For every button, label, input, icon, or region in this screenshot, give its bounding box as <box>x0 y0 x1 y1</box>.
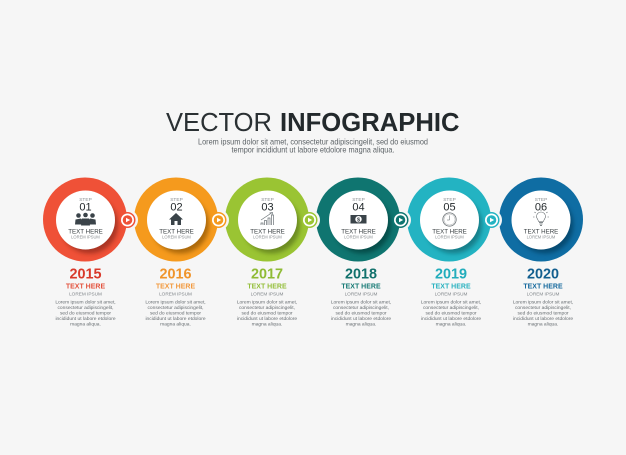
column 1 text: consectetur adipiscingelit, <box>57 305 114 311</box>
column 2 text: LOREM IPSUM <box>159 292 192 297</box>
notch 5 <box>481 210 502 230</box>
column 5 text: 2019 <box>435 266 467 282</box>
column 5 text: LOREM IPSUM <box>435 292 467 297</box>
disc 3 <box>238 190 300 254</box>
icon: light bulb <box>533 210 549 226</box>
step 1 labels: 01 <box>79 202 92 214</box>
column 1 text: sed do eiusmod tempor <box>60 310 111 316</box>
column 4 text <box>331 266 391 328</box>
step 5 labels: STEP <box>443 197 456 203</box>
column 1 text: TEXT HERE <box>66 284 105 291</box>
column 2 text: consectetur adipiscingelit, <box>147 305 204 311</box>
column 4 text: magna aliqua. <box>346 322 376 328</box>
column 4 text: consectetur adipiscingelit, <box>333 305 389 311</box>
step 2 labels <box>159 197 194 239</box>
column 4 text: sed do eiusmod tempor <box>335 310 387 316</box>
step 6 labels: 06 <box>535 202 547 214</box>
column 2 text: 2016 <box>159 266 192 282</box>
step 6 labels: STEP <box>535 197 547 203</box>
step 3 labels: TEXT HERE <box>250 228 285 235</box>
subtitle: tempor incididunt ut labore etdolore magna aliqua. <box>232 146 394 154</box>
arrow 3 <box>302 212 318 228</box>
arrow 4 <box>392 212 408 228</box>
column 3 text: magna aliqua. <box>252 322 282 328</box>
column 4 text: TEXT HERE <box>341 284 381 291</box>
title: VECTOR <box>166 109 272 137</box>
arrow 2 <box>210 212 226 228</box>
column 2 text: Lorem ipsum dolor sit amet, <box>145 300 206 306</box>
step 6 labels: TEXT HERE <box>524 228 558 235</box>
arrow 5 <box>484 212 500 228</box>
column 5 text <box>421 266 481 328</box>
column 6 text: consectetur adipiscingelit, <box>515 305 571 311</box>
icon: clock <box>443 213 456 226</box>
column 1 text: Lorem ipsum dolor sit amet, <box>55 300 116 306</box>
step 1 labels: LOREM IPSUM <box>71 234 100 239</box>
step 6 labels: LOREM IPSUM <box>527 234 556 239</box>
step 4 labels: STEP <box>352 197 365 203</box>
column 5 text: sed do eiusmod tempor <box>425 310 477 316</box>
column 4 text: 2018 <box>345 266 377 282</box>
column 1 text: LOREM IPSUM <box>69 292 102 297</box>
column 1 text: magna aliqua. <box>70 322 101 328</box>
column 4 text: incididunt ut labore etdolore <box>331 316 391 322</box>
step 2 labels: TEXT HERE <box>159 228 194 235</box>
column 2 text <box>145 266 206 328</box>
column 5 text: consectetur adipiscingelit, <box>423 305 479 311</box>
title bold: INFOGRAPHIC <box>280 109 460 137</box>
step 4 labels <box>341 197 376 239</box>
step 4 labels: 04 <box>352 202 365 214</box>
step 5 labels: LOREM IPSUM <box>435 234 464 239</box>
column 2 text: TEXT HERE <box>156 284 195 291</box>
column 6 text: LOREM IPSUM <box>527 292 559 297</box>
disc 5 <box>420 190 482 254</box>
column 5 text: magna aliqua. <box>436 322 466 328</box>
icon: banknote: $ <box>357 217 360 223</box>
step 6 ring <box>499 178 583 262</box>
subtitle: Lorem ipsum dolor sit amet, consectetur adipiscingelit, sed do eiusmod <box>198 138 428 146</box>
disc 4 <box>329 190 391 254</box>
icon: banknote <box>350 215 366 224</box>
icon: people <box>75 213 96 226</box>
step 3 labels: 03 <box>261 202 274 214</box>
column 6 text: 2020 <box>527 266 559 282</box>
step 5 labels: TEXT HERE <box>432 228 467 235</box>
step 6 labels <box>524 197 558 239</box>
step 2 labels: 02 <box>170 202 183 214</box>
step 3 labels: STEP <box>261 197 274 203</box>
arrow 1 <box>120 212 136 228</box>
disc 1 <box>56 190 118 254</box>
step 5 ring <box>407 178 491 262</box>
column 6 text: TEXT HERE <box>523 284 563 291</box>
disc 6 <box>512 190 574 254</box>
column 6 text: incididunt ut labore etdolore <box>513 316 573 322</box>
icon: growth chart <box>261 212 274 225</box>
step 3 labels <box>250 197 285 239</box>
column 2 text: magna aliqua. <box>160 322 191 328</box>
notch 2 <box>208 210 229 230</box>
step 3 ring <box>225 178 309 262</box>
step 2 labels: STEP <box>170 197 183 203</box>
notch 3 <box>299 210 320 230</box>
step 2 labels: LOREM IPSUM <box>162 234 191 239</box>
column 2 text: sed do eiusmod tempor <box>150 310 201 316</box>
column 5 text: TEXT HERE <box>431 284 471 291</box>
step 1 labels <box>68 197 103 239</box>
column 1 text <box>55 266 116 328</box>
column 4 text: LOREM IPSUM <box>345 292 377 297</box>
step 5 labels: 05 <box>443 202 456 214</box>
column 3 text: sed do eiusmod tempor <box>241 310 293 316</box>
column 4 text: Lorem ipsum dolor sit amet, <box>331 300 391 306</box>
step 1 ring <box>43 178 127 262</box>
column 6 text: sed do eiusmod tempor <box>517 310 569 316</box>
notch 4 <box>390 210 411 230</box>
disc 2 <box>147 190 209 254</box>
icon: house <box>169 213 183 225</box>
step 1 labels: STEP <box>79 197 92 203</box>
column 3 text: incididunt ut labore etdolore <box>237 316 297 322</box>
column 2 text: incididunt ut labore etdolore <box>145 316 206 322</box>
step 3 labels: LOREM IPSUM <box>253 234 282 239</box>
step 5 labels <box>432 197 467 239</box>
column 1 text: 2015 <box>69 266 102 282</box>
column 3 text <box>237 266 297 328</box>
step 4 labels: LOREM IPSUM <box>344 234 373 239</box>
step 4 labels: TEXT HERE <box>341 228 376 235</box>
column 6 text: magna aliqua. <box>528 322 558 328</box>
column 1 text: incididunt ut labore etdolore <box>55 316 116 322</box>
notch 1 <box>117 210 138 230</box>
column 6 text <box>513 266 573 328</box>
column 5 text: incididunt ut labore etdolore <box>421 316 481 322</box>
column 5 text: Lorem ipsum dolor sit amet, <box>421 300 481 306</box>
step 2 ring <box>134 178 218 262</box>
column 3 text: LOREM IPSUM <box>251 292 283 297</box>
column 3 text: Lorem ipsum dolor sit amet, <box>237 300 297 306</box>
column 3 text: consectetur adipiscingelit, <box>239 305 295 311</box>
subtitle <box>198 138 428 154</box>
step 1 labels: TEXT HERE <box>68 228 103 235</box>
step 4 ring <box>316 178 400 262</box>
column 3 text: TEXT HERE <box>247 284 287 291</box>
column 6 text: Lorem ipsum dolor sit amet, <box>513 300 573 306</box>
column 3 text: 2017 <box>251 266 283 282</box>
